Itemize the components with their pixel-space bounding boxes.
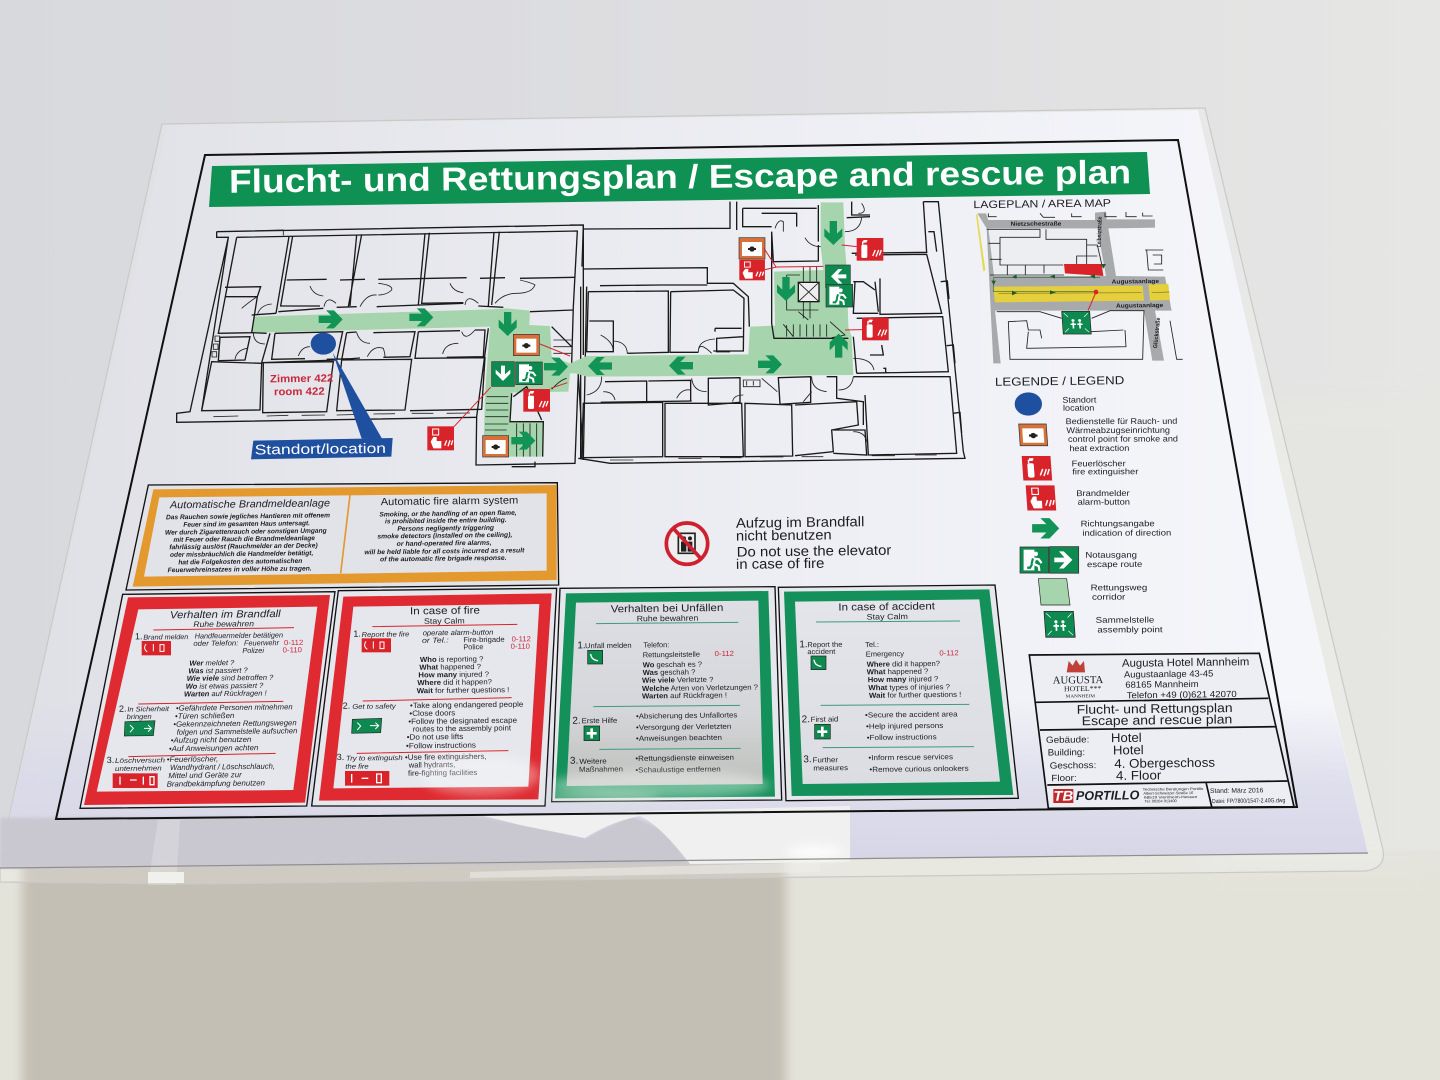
outer black frame of the plan (56, 140, 1297, 819)
icon: no elevator (666, 523, 708, 564)
building and floor data (1046, 731, 1215, 783)
legend item: assembly point: Sammelstelle (1096, 615, 1155, 625)
panel: In case of accident: What happened ? (867, 667, 928, 676)
glare on the laminate (0, 755, 1368, 885)
area map: Augustaanlage (1112, 279, 1160, 286)
panel: Verhalten im Brandfall: Ruhe bewahren (193, 619, 255, 629)
panel: In case of fire: or Tel.: (422, 636, 449, 645)
legend item: extinguisher (1022, 456, 1139, 480)
icon: extinguisher east top (857, 238, 883, 261)
panel: In case of fire: •Follow instructions (406, 741, 476, 750)
legend item: direction: Richtungsangabe (1081, 518, 1155, 528)
panel: automatic fire alarm: Automatische Brandmeldeanlage (169, 498, 330, 511)
panel: automatic fire alarm: smoke detectors (installed on the ceiling), (377, 532, 513, 540)
panel: Verhalten im Brandfall: unternehmen (115, 765, 162, 773)
panel: In case of accident: 0-112 (939, 648, 959, 657)
panel: automatic fire alarm: is prohibited inside the entire building. (385, 517, 507, 525)
panel: In case of accident: •Help injured persons (866, 721, 944, 731)
legend item: assembly point: assembly point (1097, 624, 1163, 634)
area map: Augustaanlage (1116, 303, 1164, 310)
panel: Verhalten im Brandfall: Polizei (242, 646, 264, 655)
panel: Verhalten bei Unfällen: 3. (570, 756, 578, 767)
legend item: smoke control: control point for smoke and (1068, 433, 1178, 444)
legend item: extinguisher: Feuerlöscher (1072, 458, 1126, 468)
legend item: location: location (1063, 403, 1095, 413)
panel: In case of fire: Wait for further questions ! (417, 685, 509, 695)
legend item: extinguisher: fire extinguisher (1072, 466, 1139, 476)
Portillo logo and company data: 68519 Viernheim-Hessen (1144, 795, 1197, 800)
panel: In case of fire (312, 588, 557, 806)
legend item: location: Standort (1062, 395, 1097, 405)
panel: In case of fire: Try to extinguish (346, 755, 403, 763)
icon: escape arrow down (492, 362, 514, 386)
panel: Verhalten bei Unfällen: •Rettungsdienste einweisen (635, 753, 734, 763)
panel: In case of accident: How many injured ? (868, 674, 938, 684)
building and floor data: Hotel (1111, 731, 1142, 745)
fire alarm and fire-behaviour panels (80, 483, 559, 808)
panel: In case of accident: accident (807, 647, 835, 656)
panel: Verhalten bei Unfällen: Maßnahmen (579, 764, 623, 774)
panel: Verhalten bei Unfällen: Weitere (579, 756, 607, 766)
legend item: direction: indication of direction (1082, 528, 1172, 538)
panel: automatic fire alarm (126, 483, 559, 590)
panel: Verhalten im Brandfall: Verhalten im Brandfall (170, 609, 281, 621)
building and floor data: Floor: (1051, 773, 1077, 783)
building and floor data: 4. Floor (1116, 768, 1161, 783)
plan name (1077, 701, 1233, 728)
panel: In case of accident: 1. (799, 639, 808, 650)
laminate pouch edge (0, 108, 1383, 884)
panel: automatic fire alarm: Smoking, or the handling of an open flame, (379, 510, 517, 519)
panel: Verhalten im Brandfall: Wer meldet ? (189, 658, 235, 668)
panel: Verhalten bei Unfällen (552, 587, 782, 802)
elevator warning (666, 513, 892, 572)
panel: In case of fire: •Do not use lifts (407, 732, 464, 742)
panel: In case of fire: Who is reporting ? (420, 654, 483, 664)
heading: legend: LEGENDE / LEGEND (995, 374, 1124, 389)
panel: Verhalten bei Unfällen: 1. (577, 640, 586, 651)
panel: automatic fire alarm: hat die Folgekosten des automatischen (178, 558, 302, 566)
panel: Verhalten im Brandfall: •Gekennzeichneten Rettungswegen (173, 718, 297, 729)
panel: Verhalten im Brandfall: Mittel und Geräte zur (168, 770, 242, 780)
legend item: location (1015, 392, 1097, 416)
direction arrows west (319, 308, 568, 450)
panel: Verhalten im Brandfall: •Türen schließen (175, 711, 234, 721)
area map: Nietzschestraße (1011, 222, 1062, 228)
room label: Zimmer 422 (270, 373, 333, 385)
red leader lines (454, 344, 570, 427)
panel: Verhalten im Brandfall: bringen (127, 714, 152, 721)
panel: In case of fire: 0-110 (511, 642, 530, 651)
panel: Verhalten im Brandfall: •Feuerlöscher, (167, 754, 218, 764)
hotel logo: AUGUSTA (1053, 675, 1104, 687)
icon: running man (516, 362, 542, 385)
panel: In case of accident: 2. (802, 714, 810, 725)
warning text: Do not use the elevator (737, 542, 892, 560)
hotel address: Telefon +49 (0)621 42070 (1127, 689, 1237, 700)
panel: Verhalten im Brandfall: folgen und Sammelstelle aufsuchen (177, 726, 297, 737)
panel: automatic fire alarm: Automatic fire alarm system (381, 495, 518, 508)
panel: Verhalten bei Unfällen: Welche Arten von Verletzungen ? (642, 683, 758, 693)
room label (270, 373, 333, 398)
location label: Standort/location (255, 440, 386, 457)
legend item: corridor (1038, 579, 1148, 605)
panel: Verhalten im Brandfall: Feuerwehr (244, 638, 280, 648)
location label (251, 438, 393, 459)
panel: Verhalten bei Unfällen: 0-112 (715, 649, 734, 658)
warning text: Aufzug im Brandfall (736, 513, 864, 531)
revision data: Datei: FP/7800/1547-2.40G.dwg (1212, 798, 1285, 805)
icon: extinguisher west (523, 389, 550, 412)
panel: Verhalten im Brandfall: In Sicherheit (127, 706, 170, 714)
panel: In case of fire: fire-fighting facilities (408, 768, 478, 778)
panel: Verhalten im Brandfall: 0-112 (284, 638, 303, 647)
hotel logo (1053, 660, 1104, 699)
panel: In case of fire: 2. (343, 701, 350, 711)
panel: Verhalten im Brandfall: •Gefährdete Personen mitnehmen (176, 702, 293, 713)
panel: Verhalten im Brandfall: Warten auf Rückfragen ! (184, 688, 267, 699)
panel: In case of accident: In case of accident (838, 601, 935, 614)
panel: Verhalten bei Unfällen: •Versorgung der Verletzten (636, 722, 731, 732)
legend item: corridor: corridor (1092, 592, 1126, 602)
room label: room 422 (274, 386, 325, 398)
legend item: assembly point (1044, 611, 1163, 637)
panel: In case of fire: What happened ? (419, 662, 481, 672)
panel: In case of fire: Fire-brigade (463, 635, 505, 644)
hotel logo: HOTEL*** (1064, 684, 1102, 693)
panel: In case of fire: Where did it happen? (417, 677, 492, 687)
panel: automatic fire alarm: mit Feuer oder Rauch die Brandmeldeanlage (173, 535, 315, 544)
revision data: Stand: März 2016 (1210, 787, 1264, 795)
walls west wing (177, 225, 587, 467)
icon: smoke control east (739, 238, 765, 259)
panel: automatic fire alarm: Wer durch Zigarettenrauch oder sonstigen Umgang (165, 528, 327, 537)
panel: In case of accident: •Secure the accident area (865, 709, 959, 720)
stair treads (485, 340, 572, 457)
hotel logo: MANNHEIM (1066, 693, 1095, 699)
panel: Verhalten im Brandfall: Wie viele sind betroffen ? (187, 673, 274, 683)
panel: Verhalten im Brandfall: 2. (119, 704, 127, 714)
panel: In case of fire: Get to safety (352, 703, 396, 711)
panel: In case of accident: Emergency (866, 649, 904, 659)
legend item: alarm: Brandmelder (1076, 488, 1130, 498)
panel: automatic fire alarm: Feuerwehreinsatzes in voller Höhe zu tragen. (168, 565, 312, 574)
panel: Verhalten bei Unfällen: Ruhe bewahren (637, 614, 698, 623)
panel: Verhalten bei Unfällen: Erste Hilfe (582, 716, 617, 725)
panel: Verhalten im Brandfall: •Aufzug nicht benutzen (171, 735, 251, 745)
icon: running man east (826, 284, 853, 307)
escape corridor east (570, 202, 853, 377)
panel: Verhalten bei Unfällen: Wie viele Verletzte ? (642, 675, 713, 685)
panel: In case of accident: 3. (803, 754, 812, 765)
panel: In case of accident: Wait for further questions ! (869, 690, 961, 700)
Portillo logo and company data: Tel. 06204 913400 (1145, 799, 1177, 804)
hotel address: 68165 Mannheim (1125, 679, 1199, 690)
floor plan: west wing (177, 225, 590, 467)
panel: automatic fire alarm: oder missbräuchlich die Handmelder betätigt, (170, 550, 314, 559)
panel: Verhalten bei Unfällen: •Absicherung des Unfallortes (636, 710, 738, 721)
title bar (209, 152, 1150, 207)
panel: Verhalten im Brandfall: Brandbekämpfung benutzen (167, 778, 265, 789)
icon: smoke control west (513, 334, 539, 356)
direction arrows east (588, 221, 848, 375)
panel: Verhalten bei Unfällen: •Schaulustige entfernen (635, 764, 721, 775)
panel: In case of accident: •Inform rescue services (868, 752, 953, 762)
accident panels (552, 585, 1018, 802)
panel: Verhalten bei Unfällen: •Anweisungen beachten (636, 733, 722, 743)
panel: In case of fire: Police (463, 642, 483, 651)
panel: Verhalten im Brandfall (80, 592, 335, 808)
panel: In case of fire: 1. (353, 629, 361, 639)
escape corridor west (252, 308, 590, 457)
panel: In case of accident (778, 585, 1018, 801)
panel: Verhalten im Brandfall: Was ist passiert ? (188, 666, 249, 675)
panel: Verhalten im Brandfall: 1. (135, 631, 143, 641)
Portillo logo and company data (1053, 787, 1203, 804)
warning text: in case of fire (736, 555, 825, 572)
hotel address (1122, 656, 1249, 700)
panel: In case of fire: 0-112 (512, 634, 531, 643)
panel: Verhalten im Brandfall: Wo ist etwas passiert ? (186, 681, 264, 691)
panel: automatic fire alarm: Feuer sind im gesamten Haus untersagt. (183, 520, 310, 529)
panel: In case of fire: •Use fire extinguishers, (405, 752, 487, 762)
title block (1029, 653, 1294, 808)
panel: Verhalten im Brandfall: oder Telefon: (193, 638, 238, 648)
panel: Verhalten im Brandfall: •Auf Anweisungen achten (169, 743, 258, 753)
panel: In case of fire: 3. (337, 752, 344, 762)
area map: Leibnizstraße (1097, 216, 1104, 247)
Portillo logo and company data: PORTILLO (1076, 788, 1140, 803)
legend item: smoke control (1019, 416, 1178, 453)
icon: extinguisher east lower (862, 318, 889, 340)
panel: In case of accident: •Remove curious onlookers (869, 764, 969, 774)
icon: smoke control stairs (483, 436, 509, 457)
area map (976, 212, 1183, 363)
white paper sheet (0, 110, 1368, 868)
legend item: direction (1032, 518, 1172, 538)
panel: Verhalten bei Unfällen: Unfall melden (585, 641, 632, 650)
hotel address: Augusta Hotel Mannheim (1122, 656, 1249, 670)
panel: Verhalten im Brandfall: 3. (107, 755, 114, 765)
panel: automatic fire alarm: of the automatic fire brigade response. (380, 555, 507, 563)
legend item: smoke control: Bedienstelle für Rauch- und (1066, 416, 1178, 426)
panel: automatic fire alarm: Das Rauchen sowie jegliches Hantieren mit offenem (166, 512, 330, 521)
icon: alarm button east (739, 260, 765, 280)
panel: Verhalten bei Unfällen: Wo geschah es ? (643, 660, 702, 669)
Portillo logo and company data: Technische Beratungen Portillo (1143, 787, 1203, 792)
panel: In case of accident: What types of injuries ? (868, 682, 950, 692)
legend item: smoke control: Wärmeabzugseinrichtung (1066, 425, 1170, 435)
panel: Verhalten bei Unfällen: Was geschah ? (643, 667, 695, 677)
panel: Verhalten im Brandfall: Brand melden (143, 634, 188, 642)
red leader lines east (764, 245, 862, 330)
location pointer and marker (311, 333, 382, 439)
legend item: alarm (1026, 485, 1130, 511)
panel: In case of fire: •Follow the designated escape (408, 716, 517, 726)
panel: In case of fire: •Take along endangered people (410, 700, 523, 710)
panel: In case of fire: the fire (345, 764, 369, 771)
panel: automatic fire alarm: fahrlässig auslöst (Rauchmelder an der Decke) (169, 542, 318, 551)
panel: Verhalten bei Unfällen: Telefon: (643, 640, 669, 649)
panel: Verhalten im Brandfall: Handfeuermelder betätigen (195, 630, 283, 641)
panel: In case of fire: Stay Calm (424, 616, 465, 626)
panel: In case of fire: Report the fire (362, 631, 409, 639)
area map and legend (973, 197, 1183, 637)
Portillo logo and company data: TB (1053, 788, 1073, 804)
icon: arrow left sign (826, 265, 850, 288)
legend item: alarm: alarm-button (1078, 497, 1130, 507)
Portillo logo and company data: Albert-Schweitzer-Straße 16 (1143, 791, 1193, 796)
legend item: escape route: escape route (1087, 559, 1143, 569)
panel: In case of fire: In case of fire (410, 606, 480, 617)
panel: In case of accident: Report the (807, 640, 842, 649)
legend item: corridor: Rettungsweg (1091, 582, 1148, 592)
panel: In case of fire: •Close doors (409, 708, 456, 718)
panel: Verhalten im Brandfall: 0-110 (283, 645, 302, 654)
panel: In case of accident: Where did it happen? (867, 659, 940, 669)
panel: In case of fire: How many injured ? (418, 670, 489, 679)
panel: In case of fire: routes to the assembly point (413, 723, 512, 734)
panel: automatic fire alarm: or hand-operated fire alarms, (397, 540, 492, 548)
panel: Verhalten bei Unfällen: 2. (572, 716, 581, 727)
plan name: Escape and rescue plan (1082, 712, 1232, 728)
hotel address: Augustaanlage 43-45 (1124, 668, 1213, 680)
building and floor data: Geschoss: (1050, 760, 1096, 771)
panel: automatic fire alarm: Persons negligently triggering (397, 525, 494, 533)
floor plan: east wing (570, 202, 965, 463)
walls east wing (570, 202, 965, 463)
panel: Verhalten im Brandfall: Löschversuch (115, 757, 165, 765)
revision data (1210, 787, 1285, 805)
heading: area map: LAGEPLAN / AREA MAP (973, 197, 1111, 211)
building and floor data: Gebäude: (1046, 734, 1089, 745)
legend item: escape route (1020, 547, 1143, 573)
building and floor data: 4. Obergeschoss (1114, 756, 1215, 771)
title: Flucht- und Rettungsplan / Escape and rescue plan (229, 153, 1131, 200)
panel: In case of accident: Stay Calm (867, 612, 908, 622)
photo background: wall below the sheet (0, 400, 1440, 1080)
warning text (736, 513, 892, 572)
panel: In case of accident: •Follow instructions (867, 732, 937, 742)
panel: In case of accident: measures (813, 763, 848, 773)
panel: Verhalten bei Unfällen: Verhalten bei Unfällen (611, 603, 724, 615)
panel: Verhalten im Brandfall: Wandhydrant / Löschschlauch, (170, 762, 275, 772)
icon: alarm button west (427, 426, 454, 450)
panel: In case of accident: Tel.: (865, 640, 879, 649)
warning text: nicht benutzen (736, 526, 832, 544)
panel: In case of fire: operate alarm-button (423, 628, 493, 637)
stair block (783, 267, 845, 338)
panel: In case of accident: First aid (811, 714, 838, 724)
area map: Glückstraße (1153, 317, 1162, 349)
panel: In case of accident: Further (813, 755, 839, 764)
building and floor data: Building: (1048, 747, 1085, 758)
panel: Verhalten bei Unfällen: Rettungsleitstelle (643, 650, 700, 659)
legend item: escape route: Notausgang (1085, 550, 1137, 560)
panel: Verhalten bei Unfällen: Warten auf Rückfragen ! (642, 690, 727, 701)
building and floor data: Hotel (1113, 743, 1144, 758)
legend item: smoke control: heat extraction (1069, 443, 1130, 453)
plan name: Flucht- und Rettungsplan (1077, 701, 1233, 717)
panel: In case of fire: wall hydrants, (408, 760, 455, 770)
panel: automatic fire alarm: will be held liable for all costs incurred as a result (364, 547, 525, 556)
